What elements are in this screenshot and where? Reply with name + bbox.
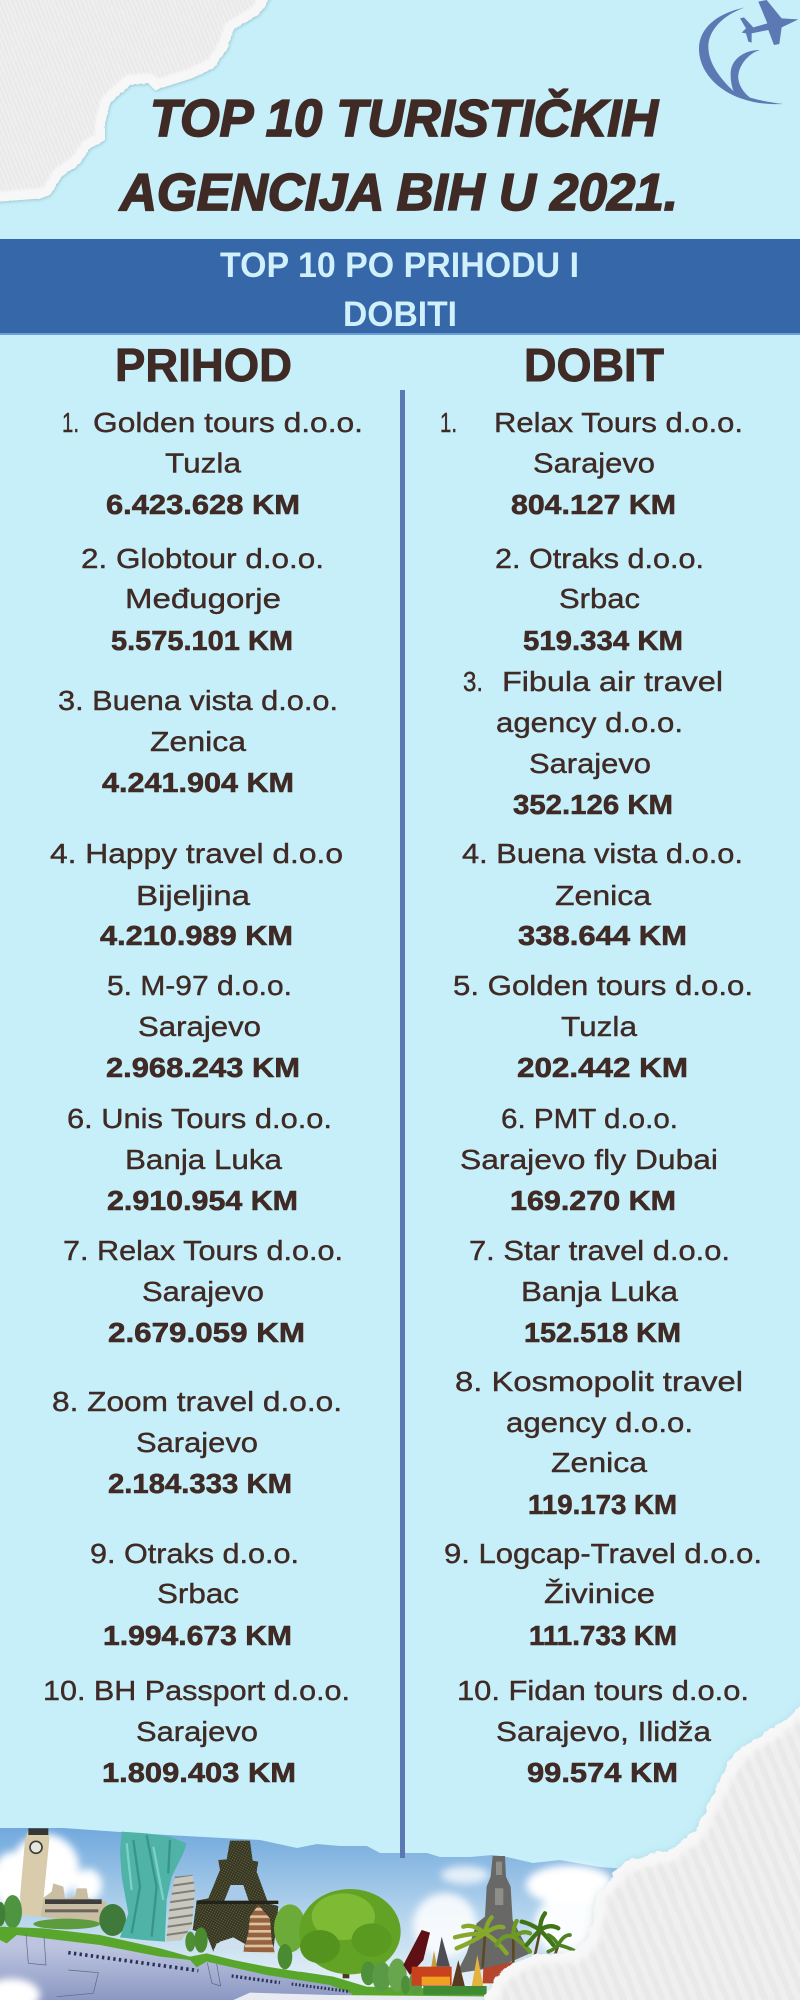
entry 10: Sarajevo bbox=[136, 1716, 258, 1747]
small trees centre bbox=[185, 1904, 306, 1969]
palm trees bbox=[455, 1913, 575, 1967]
tower of pisa bbox=[166, 1875, 195, 1942]
entry 7 bbox=[469, 1235, 730, 1348]
band: subtitle bbox=[0, 239, 800, 335]
entry 7: 2.679.059 KM bbox=[108, 1317, 305, 1348]
entry 4: 4.210.989 KM bbox=[100, 920, 293, 951]
entry 10: 10. Fidan tours d.o.o. bbox=[457, 1675, 749, 1706]
entry 2 bbox=[495, 543, 704, 656]
entry 3: 3. bbox=[463, 666, 483, 697]
grass back bbox=[300, 1972, 487, 2000]
entry 4 bbox=[50, 838, 343, 951]
torn paper: top left bbox=[0, 0, 280, 207]
entry 10: 99.574 KM bbox=[527, 1757, 678, 1788]
title: AGENCIJA BIH U 2021. bbox=[118, 164, 678, 222]
entry 10 bbox=[43, 1675, 350, 1788]
entry 2: 2. Globtour d.o.o. bbox=[81, 543, 324, 574]
entry 7: 152.518 KM bbox=[524, 1317, 681, 1348]
entry 6: 6. Unis Tours d.o.o. bbox=[67, 1103, 332, 1134]
entry 3: 352.126 KM bbox=[513, 789, 673, 820]
entry 2: Srbac bbox=[559, 583, 640, 614]
panel: prihod list bbox=[43, 407, 363, 1788]
entry 5 bbox=[106, 970, 300, 1083]
clouds bbox=[0, 1834, 615, 1959]
entry 8: 8. Kosmopolit travel bbox=[455, 1366, 743, 1397]
entry 4 bbox=[462, 838, 743, 951]
entry 1: 1. bbox=[440, 407, 457, 438]
entry 9: Živinice bbox=[544, 1578, 655, 1609]
entry 3 bbox=[463, 666, 723, 820]
entry 5 bbox=[453, 970, 753, 1083]
statue of liberty bbox=[120, 1832, 187, 1942]
entry 3: Sarajevo bbox=[529, 748, 651, 779]
cloud under plane bbox=[0, 1978, 40, 2000]
icon: plane bbox=[740, 0, 798, 45]
entry 8: 8. Zoom travel d.o.o. bbox=[52, 1386, 342, 1417]
entry 3: Fibula air travel bbox=[502, 666, 723, 697]
entry 1 bbox=[62, 407, 363, 520]
entry 10 bbox=[457, 1675, 749, 1788]
airplane bbox=[0, 1927, 500, 2000]
entry 3: agency d.o.o. bbox=[496, 707, 683, 738]
band: subtitle: TOP 10 PO PRIHODU I bbox=[220, 246, 579, 285]
entry 6: 169.270 KM bbox=[510, 1185, 676, 1216]
entry 4: 338.644 KM bbox=[518, 920, 687, 951]
entry 6 bbox=[67, 1103, 332, 1216]
torn paper: bottom right bbox=[482, 1706, 800, 2000]
logo: crescent and plane bbox=[699, 0, 798, 104]
temple of dawn bbox=[457, 1856, 530, 1973]
entry 10: 1.809.403 KM bbox=[102, 1757, 296, 1788]
entry 4: 4. Happy travel d.o.o bbox=[50, 838, 343, 869]
entry 6 bbox=[460, 1103, 718, 1216]
entry 8: agency d.o.o. bbox=[506, 1407, 693, 1438]
entry 7 bbox=[63, 1235, 343, 1348]
entry 6: 2.910.954 KM bbox=[107, 1185, 298, 1216]
entry 6: Banja Luka bbox=[125, 1144, 282, 1175]
entry 5: Tuzla bbox=[561, 1011, 637, 1042]
band: subtitle: DOBITI bbox=[343, 295, 457, 334]
entry 2 bbox=[81, 543, 324, 656]
icon: crescent bbox=[699, 7, 783, 104]
entry 1: 1. bbox=[62, 407, 79, 438]
big ben and parliament bbox=[20, 1828, 107, 1925]
pagoda bbox=[243, 1905, 275, 1953]
entry 1: Sarajevo bbox=[533, 448, 655, 478]
panel: dobit list bbox=[440, 407, 762, 1788]
entry 3 bbox=[58, 685, 338, 798]
entry 9 bbox=[444, 1538, 762, 1651]
heading: prihod: PRIHOD bbox=[115, 339, 292, 391]
entry 7: 7. Relax Tours d.o.o. bbox=[63, 1235, 343, 1266]
entry 2: 519.334 KM bbox=[523, 625, 683, 656]
entry 7: Sarajevo bbox=[142, 1276, 264, 1307]
entry 9 bbox=[90, 1538, 299, 1651]
grass front bbox=[0, 1927, 353, 2000]
entry 4: Zenica bbox=[555, 880, 651, 911]
entry 8 bbox=[52, 1386, 342, 1499]
entry 3: 4.241.904 KM bbox=[102, 767, 294, 798]
fuselage bbox=[0, 1935, 352, 2000]
entry 8 bbox=[455, 1366, 743, 1520]
entry 1: Tuzla bbox=[165, 448, 241, 478]
entry 5: Sarajevo bbox=[138, 1011, 261, 1042]
entry 4: Bijeljina bbox=[136, 880, 251, 911]
entry 9: 9. Logcap-Travel d.o.o. bbox=[444, 1538, 762, 1569]
entry 8: 2.184.333 KM bbox=[108, 1468, 292, 1499]
entry 2: Međugorje bbox=[125, 583, 281, 614]
entry 1: 6.423.628 KM bbox=[106, 489, 300, 520]
entry 2: 2. Otraks d.o.o. bbox=[495, 543, 704, 574]
entry 1: Relax Tours d.o.o. bbox=[494, 407, 743, 438]
entry 6: 6. PMT d.o.o. bbox=[501, 1103, 678, 1134]
right scene group bbox=[299, 1856, 575, 2000]
entry 8: 119.173 KM bbox=[528, 1489, 677, 1520]
entry 9: Srbac bbox=[157, 1578, 239, 1609]
bushes and trees left bbox=[0, 1895, 126, 1936]
red tower bbox=[403, 1930, 430, 1975]
thai temple buildings bbox=[412, 1937, 517, 1995]
sky bbox=[0, 1828, 640, 2000]
entry 9: 9. Otraks d.o.o. bbox=[90, 1538, 299, 1569]
entry 9: 1.994.673 KM bbox=[103, 1620, 292, 1651]
title bbox=[118, 89, 678, 222]
entry 10: Sarajevo, Ilidža bbox=[496, 1716, 711, 1747]
entry 8: Sarajevo bbox=[136, 1427, 258, 1458]
title: TOP 10 TURISTIČKIH bbox=[150, 89, 659, 148]
entry 7: Banja Luka bbox=[521, 1276, 678, 1307]
entry 5: 2.968.243 KM bbox=[106, 1052, 300, 1083]
entry 5: 5. M-97 d.o.o. bbox=[107, 970, 292, 1001]
big tree bbox=[299, 1889, 401, 1978]
entry 9: 111.733 KM bbox=[529, 1620, 677, 1651]
eiffel tower bbox=[193, 1841, 278, 1952]
entry 2: 5.575.101 KM bbox=[111, 625, 293, 656]
scene: world landmarks bbox=[0, 1828, 640, 2000]
small trees bbox=[361, 1958, 422, 1995]
entry 1 bbox=[440, 407, 743, 520]
divider: vertical line bbox=[400, 390, 405, 1858]
entry 3: Zenica bbox=[150, 726, 246, 757]
entry 8: Zenica bbox=[551, 1447, 647, 1478]
windows bbox=[68, 1953, 350, 1992]
entry 5: 202.442 KM bbox=[517, 1052, 688, 1083]
entry 3: 3. Buena vista d.o.o. bbox=[58, 685, 338, 716]
entry 5: 5. Golden tours d.o.o. bbox=[453, 970, 753, 1001]
entry 7: 7. Star travel d.o.o. bbox=[469, 1235, 730, 1266]
left scene group bbox=[0, 1828, 306, 1969]
entry 1: 804.127 KM bbox=[511, 489, 676, 520]
entry 6: Sarajevo fly Dubai bbox=[460, 1144, 718, 1175]
entry 4: 4. Buena vista d.o.o. bbox=[462, 838, 743, 869]
heading: dobit: DOBIT bbox=[524, 339, 664, 391]
entry 10: 10. BH Passport d.o.o. bbox=[43, 1675, 350, 1706]
entry 1: Golden tours d.o.o. bbox=[93, 407, 363, 438]
engine bbox=[233, 1993, 500, 2000]
